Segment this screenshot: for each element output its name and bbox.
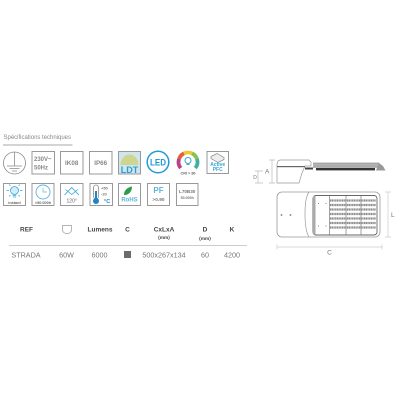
table data row: STRADA: 60 bbox=[201, 250, 209, 260]
heading: technical specifications bbox=[3, 134, 72, 146]
icon: CRI colour wheel bbox=[179, 153, 197, 176]
dimension: D bbox=[255, 171, 263, 183]
badge: IK08: IK08 bbox=[65, 160, 79, 167]
icon: lifetime clock bbox=[32, 184, 54, 206]
table header row bbox=[20, 226, 235, 242]
drawing: top view of luminaire: C bbox=[327, 250, 332, 256]
badge: power factor bbox=[148, 184, 170, 206]
dimension: L bbox=[385, 192, 391, 237]
icon: temperature range: -20 bbox=[101, 192, 108, 196]
icon: temperature range: +50 bbox=[101, 186, 109, 190]
icon: Active PFC bbox=[207, 152, 228, 174]
drawing: top view of luminaire bbox=[277, 192, 395, 256]
icon: RoHS bbox=[118, 184, 140, 206]
table header row: REF bbox=[20, 226, 33, 234]
icon: instant start: instant bbox=[8, 201, 21, 205]
table header row: C bbox=[125, 226, 130, 234]
table header row: (mm) bbox=[158, 235, 170, 241]
table header row: K bbox=[230, 226, 235, 234]
icon: LED: LED bbox=[150, 158, 166, 168]
badge: L70B30: 50.000h bbox=[181, 196, 194, 200]
icon: instant start bbox=[4, 184, 26, 206]
icon: LED bbox=[147, 151, 169, 173]
icon: lifetime clock: >50.000h bbox=[35, 201, 52, 205]
icon: temperature range: °C bbox=[104, 199, 110, 205]
icon: beam angle 120: 120° bbox=[67, 198, 77, 204]
table header row: CxLxA bbox=[154, 226, 175, 234]
badge: power factor: PF bbox=[153, 186, 164, 195]
table data row: STRADA: STRADA bbox=[11, 250, 41, 260]
dimension: C bbox=[277, 244, 382, 250]
LED array bbox=[330, 200, 376, 228]
badge: 230V 50Hz: 50Hz bbox=[34, 166, 48, 172]
badge: L70B30: L70B30 bbox=[179, 189, 196, 194]
badge: 230V 50Hz bbox=[32, 152, 54, 174]
drawing: top view of luminaire: L bbox=[391, 212, 395, 219]
table header row: (mm) bbox=[199, 236, 211, 242]
drawing: side view of luminaire: A bbox=[265, 168, 270, 176]
table data row: STRADA: 6000 bbox=[92, 250, 108, 260]
icon: earth symbol bbox=[4, 152, 26, 174]
badge: 230V 50Hz: 230V~ bbox=[34, 157, 52, 163]
table: product data bbox=[9, 226, 247, 260]
icon: Active PFC: PFC bbox=[213, 167, 223, 173]
table header row: Lumens bbox=[88, 226, 113, 234]
dimension: A bbox=[269, 160, 275, 183]
icon: CRI colour wheel: CRI > 80 bbox=[180, 172, 196, 176]
drawing: side view of luminaire: D bbox=[253, 175, 257, 181]
heading: technical specifications: Spécifications techniques bbox=[4, 134, 72, 141]
drawing: side view of luminaire bbox=[253, 160, 386, 183]
icon: LDT: LDT bbox=[121, 165, 139, 175]
badge: L70B30 bbox=[176, 184, 198, 206]
icon: beam angle 120 bbox=[60, 184, 83, 206]
table header row: D bbox=[203, 226, 208, 234]
badge: power factor: >0.90 bbox=[152, 197, 165, 203]
badge: IP66: IP66 bbox=[94, 160, 108, 167]
icon: RoHS: RoHS bbox=[121, 198, 138, 204]
table data row: STRADA: 500x267x134 bbox=[142, 250, 186, 260]
icon: LDT bbox=[118, 152, 140, 175]
badge: IK08 bbox=[60, 152, 83, 174]
table data row: STRADA bbox=[11, 250, 240, 260]
icon: temperature range bbox=[90, 184, 112, 206]
badge: IP66 bbox=[90, 152, 112, 174]
table data row: STRADA: 4200 bbox=[224, 250, 240, 260]
icon: Active PFC: Active bbox=[210, 162, 225, 168]
table data row: STRADA: 60W bbox=[59, 250, 74, 260]
